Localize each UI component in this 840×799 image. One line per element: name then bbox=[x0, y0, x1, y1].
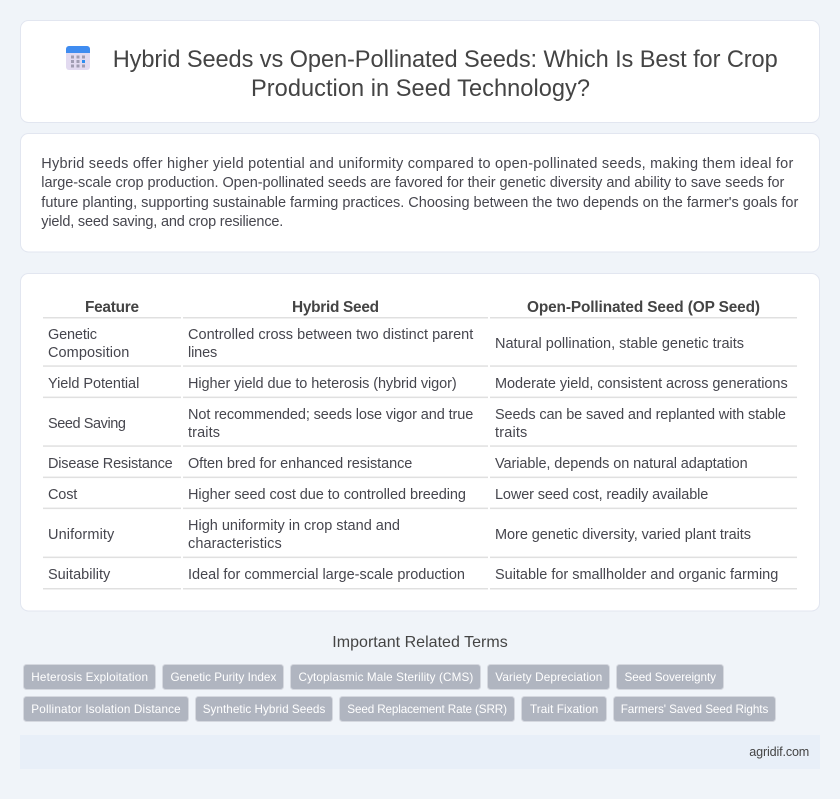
panel: introduction bbox=[20, 134, 820, 252]
tag: seed replacement rate bbox=[340, 696, 514, 722]
tag: synthetic hybrid seeds bbox=[196, 696, 332, 722]
table header bbox=[85, 299, 760, 316]
row: seed saving bbox=[48, 407, 786, 441]
row: cost bbox=[48, 487, 708, 503]
row: seed saving: traits bbox=[188, 425, 220, 441]
tag: trait fixation: Trait Fixation bbox=[530, 703, 598, 716]
related terms tags bbox=[24, 664, 776, 722]
tag: farmers' saved seed rights bbox=[614, 696, 776, 722]
tag: synthetic hybrid seeds: Synthetic Hybrid Seeds bbox=[203, 703, 325, 716]
footer bar: agridif.com bbox=[749, 745, 809, 759]
tag: cytoplasmic male sterility bbox=[290, 664, 480, 690]
title: Hybrid Seeds vs Open-Pollinated Seeds: Which Is Best for Crop bbox=[113, 47, 778, 73]
row: disease resistance: Variable, depends on natural adaptation bbox=[495, 456, 748, 472]
title panel bbox=[20, 20, 820, 122]
row: uniformity: Uniformity bbox=[48, 527, 115, 543]
tag: seed sovereignty bbox=[616, 664, 724, 690]
row: yield potential bbox=[48, 376, 788, 392]
row: genetic composition: Controlled cross between two distinct parent bbox=[188, 327, 473, 343]
panel: comparison table bbox=[20, 274, 820, 611]
intro text: large-scale crop production. Open-pollinated seeds are favored for their genetic diversity and ability to save seeds for bbox=[41, 175, 784, 191]
table header: Hybrid Seed bbox=[292, 299, 379, 316]
intro text: yield, seed saving, and crop resilience. bbox=[41, 214, 283, 230]
row: suitability: Ideal for commercial large-scale production bbox=[188, 567, 465, 583]
row: yield potential: Yield Potential bbox=[48, 376, 139, 392]
row: disease resistance bbox=[48, 456, 748, 472]
heading: important related terms: Important Related Terms bbox=[332, 634, 508, 651]
tag: variety depreciation: Variety Depreciation bbox=[495, 671, 602, 684]
tag: farmers' saved seed rights: Farmers' Saved Seed Rights bbox=[621, 703, 768, 716]
row: uniformity: More genetic diversity, varied plant traits bbox=[495, 527, 751, 543]
row: seed saving: Seed Saving bbox=[48, 416, 126, 432]
tag: seed sovereignty: Seed Sovereignty bbox=[624, 671, 716, 684]
row: disease resistance: Often bred for enhanced resistance bbox=[188, 456, 412, 472]
table header: Open-Pollinated Seed (OP Seed) bbox=[527, 299, 760, 316]
tag: heterosis exploitation: Heterosis Exploitation bbox=[31, 671, 148, 684]
row: seed saving: Not recommended; seeds lose vigor and true bbox=[188, 407, 473, 423]
tag: variety depreciation bbox=[488, 664, 610, 690]
tag: trait fixation bbox=[522, 696, 606, 722]
row: cost: Higher seed cost due to controlled breeding bbox=[188, 487, 466, 503]
intro text: future planting, supporting sustainable farming practices. Choosing between the two depends on the farmer's goals for bbox=[41, 195, 798, 211]
row: cost: Cost bbox=[48, 487, 77, 503]
table header: Feature bbox=[85, 299, 139, 316]
icon: calendar bbox=[66, 46, 90, 70]
row: seed saving: Seeds can be saved and replanted with stable bbox=[495, 407, 786, 423]
title: Production in Seed Technology? bbox=[251, 76, 590, 102]
row: genetic composition: lines bbox=[188, 345, 217, 361]
tag: seed replacement rate: Seed Replacement Rate (SRR) bbox=[347, 703, 507, 716]
row: uniformity bbox=[48, 518, 751, 552]
intro text: Hybrid seeds offer higher yield potential and uniformity compared to open-pollinated seeds, making them ideal for bbox=[41, 156, 793, 172]
row: suitability: Suitability bbox=[48, 567, 111, 583]
row: yield potential: Higher yield due to heterosis (hybrid vigor) bbox=[188, 376, 457, 392]
tag: genetic purity index: Genetic Purity Index bbox=[170, 671, 276, 684]
tag: pollinator isolation distance bbox=[24, 696, 188, 722]
title bbox=[113, 47, 778, 102]
row: genetic composition: Natural pollination, stable genetic traits bbox=[495, 336, 744, 352]
row: suitability bbox=[48, 567, 778, 583]
row: uniformity: characteristics bbox=[188, 536, 282, 552]
row: disease resistance: Disease Resistance bbox=[48, 456, 173, 472]
row: suitability: Suitable for smallholder and organic farming bbox=[495, 567, 778, 583]
tag: heterosis exploitation bbox=[24, 664, 156, 690]
row: cost: Lower seed cost, readily available bbox=[495, 487, 708, 503]
footer bar bbox=[20, 735, 820, 769]
table rules bbox=[43, 317, 797, 590]
row: genetic composition: Genetic bbox=[48, 327, 97, 343]
row: uniformity: High uniformity in crop stand and bbox=[188, 518, 400, 534]
row: genetic composition: Composition bbox=[48, 345, 129, 361]
row: genetic composition bbox=[48, 327, 744, 361]
intro text bbox=[41, 156, 798, 230]
tag: genetic purity index bbox=[162, 664, 284, 690]
row: yield potential: Moderate yield, consistent across generations bbox=[495, 376, 788, 392]
tag: cytoplasmic male sterility: Cytoplasmic Male Sterility (CMS) bbox=[298, 671, 473, 684]
row: seed saving: traits bbox=[495, 425, 527, 441]
tag: pollinator isolation distance: Pollinator Isolation Distance bbox=[31, 703, 181, 716]
